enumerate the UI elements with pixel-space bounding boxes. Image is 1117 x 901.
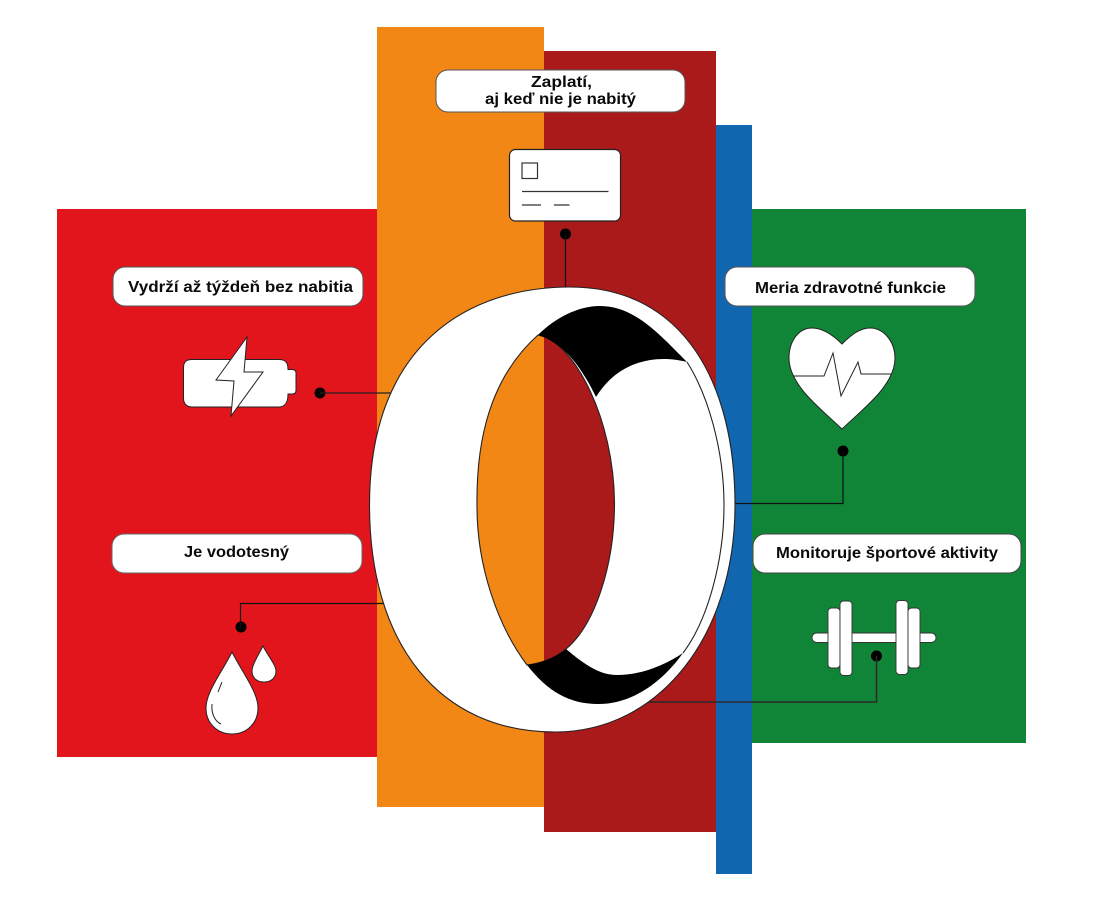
ring illustration <box>370 287 735 732</box>
ring inner band top (black) <box>538 306 687 397</box>
connector: heart to ring <box>730 446 848 504</box>
callout: payment <box>436 70 685 112</box>
icon: dumbbell <box>812 600 936 676</box>
icon: payment card <box>510 150 620 221</box>
callout: battery life: Vydrží až týždeň bez nabitia <box>128 279 353 296</box>
callout: waterproof <box>112 534 362 573</box>
callout: payment: Zaplatí, <box>531 74 592 91</box>
connector: card to ring <box>560 228 571 292</box>
panel: blue band <box>716 125 752 874</box>
callout: sport <box>753 534 1021 573</box>
panel: red band <box>57 209 377 757</box>
callout: health: Meria zdravotné funkcie <box>755 280 946 297</box>
panel: orange band <box>377 27 544 807</box>
panel: green band <box>752 209 1026 743</box>
callout: battery life <box>113 267 363 306</box>
callout: sport: Monitoruje športové aktivity <box>776 545 998 562</box>
icon: heart with pulse <box>789 328 895 429</box>
panel: dark red band <box>544 51 716 832</box>
ring inner edge line <box>683 362 724 653</box>
callout: payment: aj keď nie je nabitý <box>485 91 636 108</box>
icon: battery with lightning <box>184 337 296 416</box>
connector: water drop to ring <box>236 604 390 632</box>
connector: dumbbell to ring <box>645 650 882 702</box>
connector: battery to ring <box>314 388 395 398</box>
callout: health <box>725 267 975 306</box>
callout: waterproof: Je vodotesný <box>184 544 289 561</box>
ring body with opening <box>370 287 735 732</box>
icon: water drops <box>206 646 276 734</box>
ring inner band bottom (black) <box>527 649 683 704</box>
